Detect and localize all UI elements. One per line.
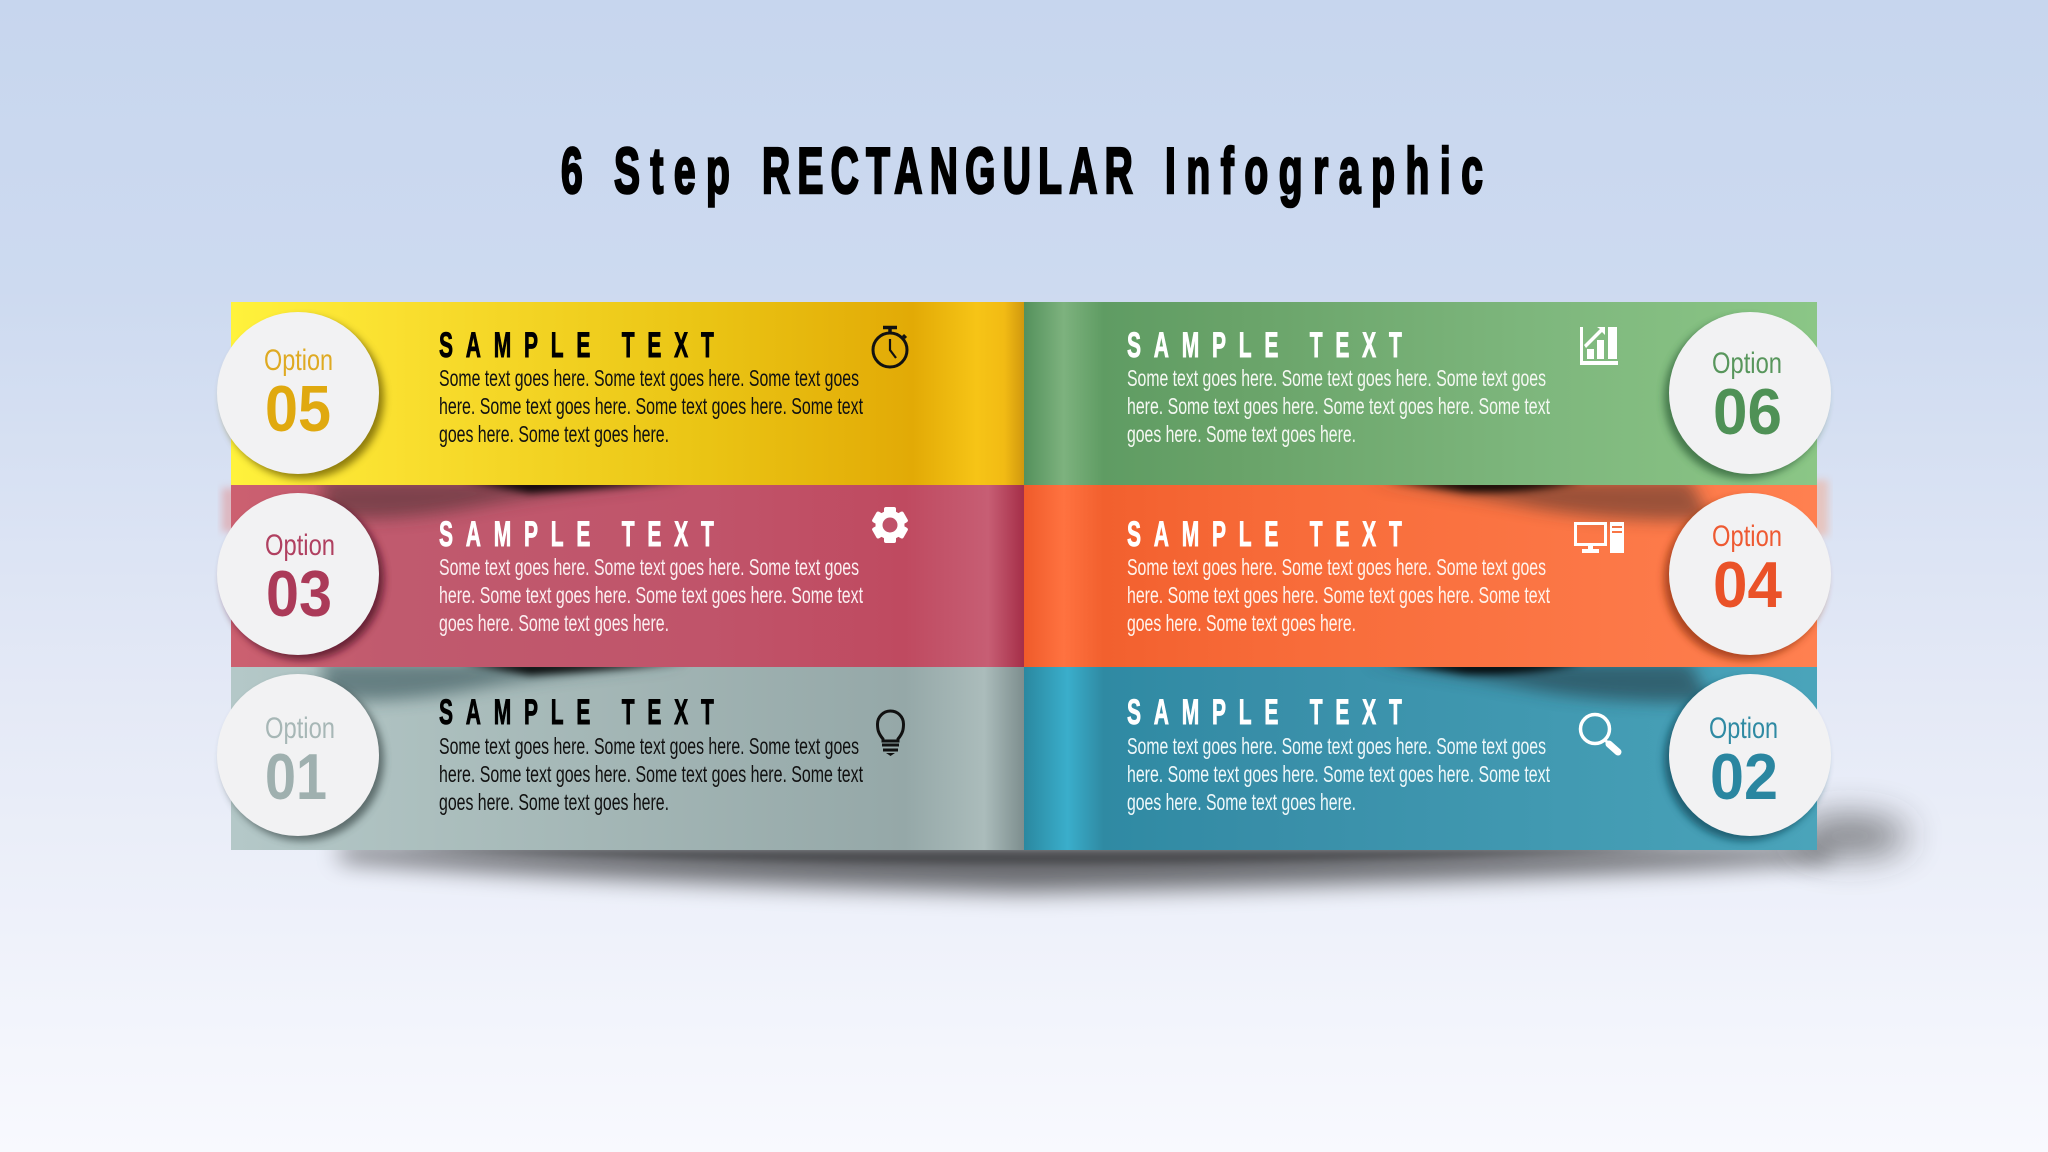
text block [439, 733, 863, 815]
circle badge 01 [217, 674, 384, 841]
circle badge 05 [217, 312, 384, 479]
bottom shadow under panels [222, 480, 1908, 892]
circle badge 04: 04 [1713, 548, 1782, 621]
heading: SAMPLE TEXT [1127, 327, 1402, 365]
text block [1127, 733, 1550, 815]
circle badge 01: 01 [265, 740, 327, 813]
circle badge 01: Option [265, 712, 335, 745]
text block: goes here. Some text goes here. [1127, 789, 1356, 815]
circle badge 02: Option [1709, 712, 1778, 745]
heading: SAMPLE TEXT [439, 694, 714, 732]
text block: goes here. Some text goes here. [439, 610, 669, 636]
icon: gear [871, 507, 909, 543]
circle badge 03: 03 [266, 557, 332, 630]
circle badge 04: Option [1712, 520, 1782, 553]
text block: Some text goes here. Some text goes here. Some text goes [1127, 365, 1546, 391]
text block: Some text goes here. Some text goes here. Some text goes [439, 733, 859, 759]
text block: Some text goes here. Some text goes here. Some text goes [1127, 554, 1546, 580]
circle badge 06: Option [1712, 347, 1782, 380]
panel: option 02 [1024, 662, 1831, 850]
circle badge 02 [1664, 674, 1831, 841]
heading: SAMPLE TEXT [439, 327, 714, 365]
icon: stopwatch [873, 328, 907, 367]
heading: SAMPLE TEXT [1127, 516, 1402, 554]
text block: goes here. Some text goes here. [1127, 421, 1356, 447]
title [561, 135, 1483, 208]
circle badge 05: Option [264, 344, 333, 377]
circle badge 05: 05 [265, 372, 331, 445]
heading: SAMPLE TEXT [1127, 694, 1402, 732]
panel: option 01 [217, 662, 1024, 850]
title: Infographic [1165, 135, 1483, 208]
panel: option 04 [1024, 480, 1831, 667]
text block: goes here. Some text goes here. [1127, 610, 1356, 636]
icon: lightbulb [878, 711, 904, 756]
circle badge 03 [217, 493, 384, 660]
text block: goes here. Some text goes here. [439, 789, 669, 815]
icon: magnifier [1580, 714, 1618, 752]
circle badge 04 [1664, 493, 1831, 660]
text block: here. Some text goes here. Some text goes here. Some text [439, 582, 863, 608]
circle badge 06: 06 [1713, 375, 1782, 448]
text block: here. Some text goes here. Some text goes here. Some text [1127, 582, 1550, 608]
text block [1127, 365, 1550, 447]
circle badge 02: 02 [1710, 740, 1778, 813]
text block: Some text goes here. Some text goes here. Some text goes [439, 554, 859, 580]
title: Step [614, 135, 730, 208]
text block [1127, 554, 1550, 636]
icon: bar chart [1580, 327, 1618, 365]
icon: desktop computer [1574, 522, 1624, 553]
text block [439, 554, 863, 636]
text block: goes here. Some text goes here. [439, 421, 669, 447]
text block [439, 365, 863, 447]
title: 6 [561, 135, 583, 208]
circle badge 03: Option [265, 529, 335, 562]
text block: here. Some text goes here. Some text goes here. Some text [1127, 761, 1550, 787]
circle badge 06 [1664, 312, 1831, 479]
panel: option 05 [217, 302, 1024, 485]
heading: SAMPLE TEXT [439, 516, 714, 554]
panel: option 06 [1024, 302, 1831, 485]
title: RECTANGULAR [762, 135, 1133, 208]
text block: Some text goes here. Some text goes here. Some text goes [439, 365, 859, 391]
panel: option 03 [217, 480, 1024, 667]
text block: here. Some text goes here. Some text goes here. Some text [1127, 393, 1550, 419]
text block: here. Some text goes here. Some text goes here. Some text [439, 761, 863, 787]
text block: Some text goes here. Some text goes here. Some text goes [1127, 733, 1546, 759]
text block: here. Some text goes here. Some text goes here. Some text [439, 393, 863, 419]
